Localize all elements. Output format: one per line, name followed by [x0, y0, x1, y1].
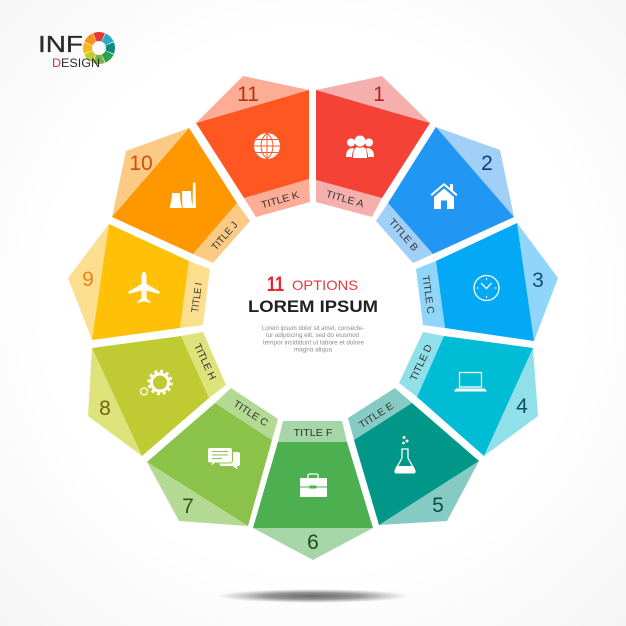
number 8: 8 — [99, 397, 111, 420]
icon: briefcase — [300, 474, 327, 497]
segment 4 — [399, 332, 538, 456]
logo ring — [84, 33, 114, 63]
segment 9 — [68, 224, 210, 340]
body paragraph: tempor incididunt ut labore et dolore — [263, 340, 365, 346]
label title F: TITLE F — [294, 428, 332, 439]
icon: people — [346, 136, 374, 158]
segment 8 — [88, 332, 226, 456]
number 5: 5 — [432, 494, 444, 517]
count 11: 11 — [267, 273, 284, 296]
icon: flask — [394, 436, 416, 474]
options label: OPTIONS — [292, 277, 358, 293]
segment 3 — [416, 223, 558, 341]
segment 2 — [376, 127, 514, 263]
center text block — [248, 273, 378, 354]
label title E: TITLE E — [357, 400, 396, 431]
icon: gears — [140, 371, 171, 395]
icon: globe — [254, 133, 280, 159]
logo — [38, 31, 114, 70]
number 7: 7 — [182, 495, 194, 518]
number 9: 9 — [82, 268, 94, 291]
number 4: 4 — [516, 395, 528, 418]
logo wordmark INF: INF — [38, 31, 83, 57]
icon: chat bubbles — [208, 448, 240, 470]
segment 6 — [253, 421, 373, 560]
icon: house — [430, 183, 458, 209]
body paragraph: tur adipiscing elit, sed do eiusmod — [266, 333, 359, 339]
body paragraph: Lorem ipsum dolor sit amet, consecte- — [262, 326, 364, 332]
segment 7 — [147, 388, 278, 526]
segment 11 — [196, 76, 310, 217]
label title H: TITLE H — [191, 342, 217, 382]
label title J: TITLE J — [210, 220, 240, 253]
label title I: TITLE I — [190, 282, 205, 313]
logo wordmark DESIGN: DESIGN — [52, 56, 100, 70]
segment 1 — [316, 76, 430, 217]
number 1: 1 — [373, 83, 385, 106]
body paragraph: magna aliqua — [294, 348, 333, 354]
icon: airplane — [128, 272, 160, 303]
segment 10 — [112, 128, 250, 263]
icon: factory — [170, 182, 196, 208]
label title A: TITLE A — [324, 189, 365, 210]
segment 5 — [348, 388, 479, 525]
number 2: 2 — [481, 152, 493, 175]
label title C: TITLE C — [419, 275, 436, 315]
icon: clock — [474, 276, 499, 300]
icon: laptop — [454, 372, 487, 392]
body paragraph — [262, 326, 365, 354]
number 3: 3 — [532, 269, 544, 292]
label title D: TITLE D — [409, 343, 435, 383]
ground shadow — [216, 589, 410, 603]
number 11: 11 — [237, 83, 259, 106]
number 10: 10 — [129, 152, 153, 175]
main heading: LOREM IPSUM — [248, 298, 378, 316]
number 6: 6 — [307, 531, 319, 554]
label title K: TITLE K — [260, 190, 301, 211]
label title B: TITLE B — [386, 217, 420, 254]
label title C second: TITLE C — [231, 399, 270, 429]
